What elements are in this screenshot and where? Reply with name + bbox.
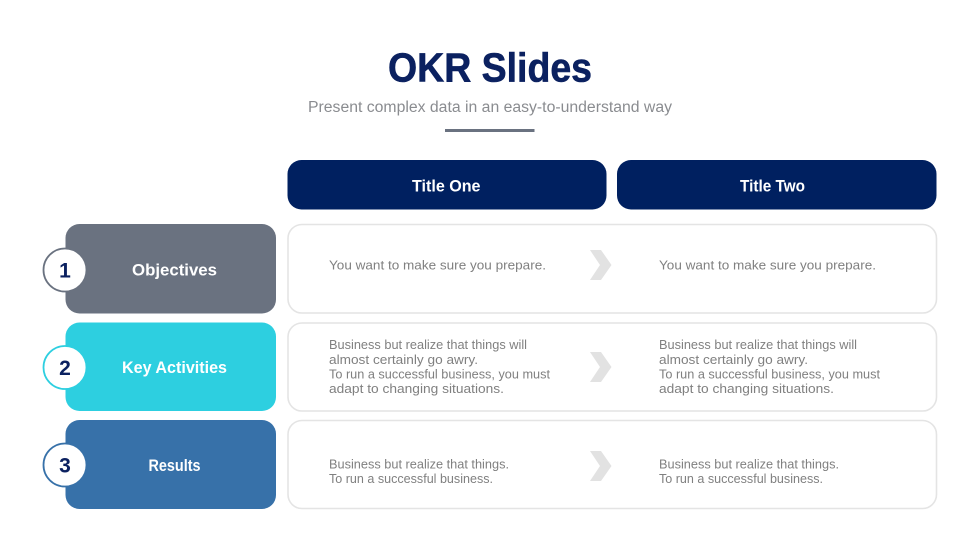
- row 1 text: Title Two: You want to make sure you prepare.: [659, 258, 876, 272]
- row 3 text: Title Two: [659, 458, 839, 486]
- column header: Title One: [288, 160, 606, 210]
- row 3 text: Title One: [329, 458, 509, 486]
- row 1: Objectives: [44, 224, 936, 314]
- row 3 chevron arrow: [590, 451, 612, 481]
- row 2 number badge: [44, 346, 86, 389]
- row 2 text: Title One: almost certainly go awry.: [329, 353, 478, 367]
- row 3 text: Title One: To run a successful business.: [329, 472, 493, 486]
- row 3 label box: [66, 420, 276, 509]
- row 2 text: Title Two: [659, 338, 881, 396]
- column header: Title One: Title One: [412, 178, 480, 196]
- row 3 number badge: [44, 444, 86, 486]
- row 1 content card: [288, 224, 936, 313]
- row 3 text: Title Two: Business but realize that things.: [659, 458, 839, 472]
- row 2 label box: Key Activities: [122, 359, 227, 377]
- row 3 content card: [288, 420, 936, 508]
- subtitle: Present complex data in an easy-to-understand way: [308, 99, 672, 116]
- row 3: Results: [44, 420, 936, 509]
- row 3 label box: Results: [148, 457, 200, 475]
- row 2 text: Title Two: almost certainly go awry.: [659, 353, 808, 367]
- title underline: [445, 129, 534, 132]
- row 2 text: Title Two: Business but realize that things will: [659, 338, 857, 352]
- row 2 text: Title One: adapt to changing situations.: [329, 382, 504, 396]
- row 1 label box: Objectives: [132, 262, 217, 280]
- row 2 number badge: 2: [59, 357, 71, 380]
- row 2 text: Title One: Business but realize that things will: [329, 338, 527, 352]
- row 3 text: Title Two: To run a successful business.: [659, 472, 823, 486]
- row 2 text: Title One: [329, 338, 551, 396]
- row 2 content card: [288, 323, 936, 411]
- column header: Title Two: Title Two: [740, 178, 805, 196]
- column header: Title Two: [617, 160, 936, 210]
- row 1 label box: [66, 224, 276, 314]
- row 1 text: Title One: You want to make sure you prepare.: [329, 258, 546, 272]
- row 1 chevron arrow: [590, 250, 612, 280]
- row 3 text: Title One: Business but realize that things.: [329, 458, 509, 472]
- row 3 number badge: 3: [59, 454, 71, 478]
- row 2 chevron arrow: [590, 352, 612, 382]
- row 1 number badge: [44, 248, 86, 292]
- row 2 text: Title Two: To run a successful business, you must: [659, 368, 881, 382]
- row 2: Key Activities: [44, 322, 936, 411]
- title: OKR Slides: [388, 44, 592, 90]
- row 2 text: Title Two: adapt to changing situations.: [659, 382, 834, 396]
- row 2 text: Title One: To run a successful business, you must: [329, 368, 551, 382]
- row 1 number badge: 1: [59, 260, 71, 282]
- row 2 label box: [66, 322, 276, 411]
